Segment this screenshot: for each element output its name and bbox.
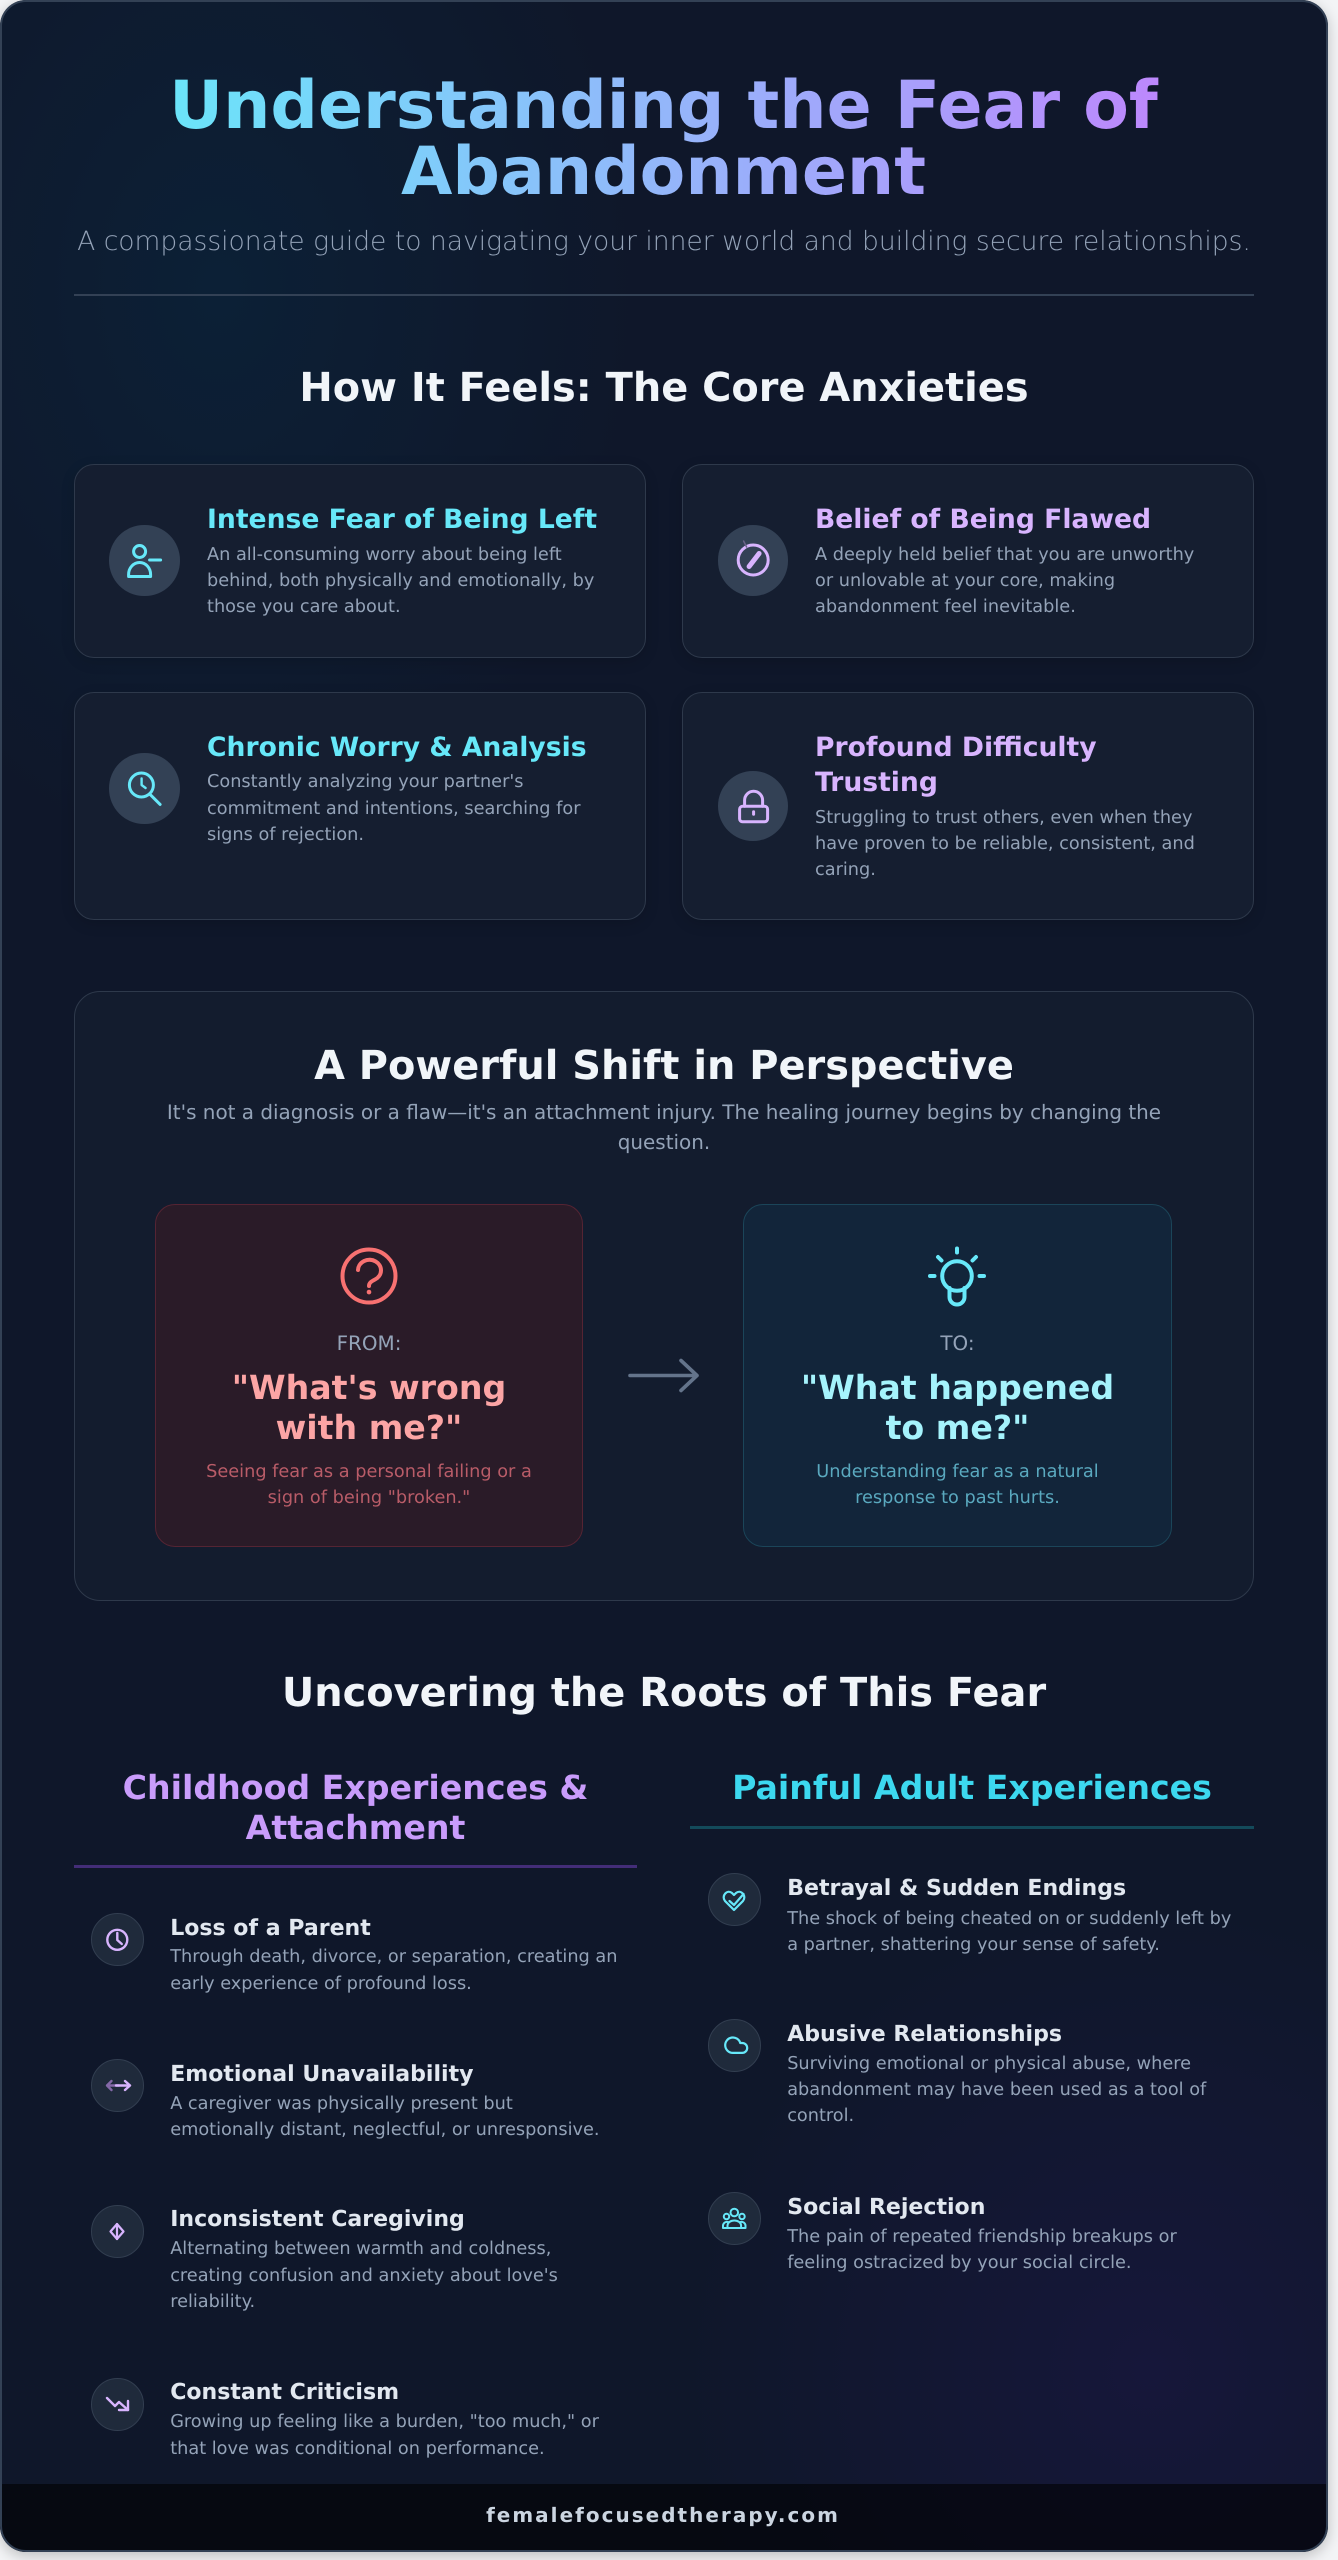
shift intro text: question. [618, 1130, 710, 1154]
shift intro text [167, 1100, 1161, 1154]
icon: trending down [91, 2378, 144, 2431]
card text: flawed [815, 504, 1194, 617]
card text: flawed: A deeply held belief that you are unworthy [815, 545, 1194, 565]
icon: user minus [109, 525, 180, 596]
to description: Understanding fear as a natural [816, 1462, 1099, 1482]
card text: flawed: or unlovable at your core, making [815, 571, 1115, 591]
heading: core anxieties: How It Feels: The Core Anxieties [299, 365, 1029, 411]
card text: intense fear: behind, both physically and emotionally, by [207, 571, 594, 591]
title [128, 72, 1198, 204]
from description: sign of being "broken." [268, 1488, 470, 1508]
item: emotional unavailability: emotionally distant, neglectful, or unresponsive. [170, 2120, 600, 2140]
card text: intense fear: Intense Fear of Being Left [207, 504, 597, 535]
from description [206, 1462, 532, 1508]
icon: flawed circle [718, 525, 788, 596]
icon: clock [91, 1913, 144, 1966]
footer link text: femalefocusedtherapy.com [486, 2503, 840, 2527]
item: inconsistent caregiving: creating confusion and anxiety about love's [170, 2266, 558, 2286]
item: constant criticism [170, 2380, 599, 2458]
item: inconsistent caregiving: Inconsistent Caregiving [170, 2207, 465, 2232]
column heading: childhood [123, 1768, 588, 1847]
panel: to [743, 1204, 1172, 1547]
icon: diamond [91, 2205, 144, 2258]
quote: what happened: "What happened [801, 1368, 1114, 1407]
panel: from [155, 1204, 583, 1547]
title: Abandonment [401, 132, 926, 210]
quote: what's wrong: with me?" [276, 1408, 462, 1447]
item: inconsistent caregiving: Alternating between warmth and coldness, [170, 2239, 551, 2259]
card text: trusting: Trusting [815, 767, 938, 798]
card text: chronic worry: Constantly analyzing your partner's [207, 772, 523, 792]
item: constant criticism: Growing up feeling like a burden, "too much," or [170, 2412, 599, 2432]
card text: chronic worry: Chronic Worry & Analysis [207, 732, 587, 763]
icon: arrows apart [91, 2059, 144, 2112]
label: from: FROM: [337, 1332, 401, 1355]
item: betrayal [787, 1876, 1231, 1955]
item: betrayal: Betrayal & Sudden Endings [787, 1876, 1126, 1901]
item: betrayal: a partner, shattering your sense of safety. [787, 1935, 1160, 1955]
column heading: childhood: Attachment [246, 1808, 465, 1847]
item: loss of a parent: Through death, divorce, or separation, creating an [170, 1947, 617, 1967]
item: betrayal: The shock of being cheated on or suddenly left by [787, 1909, 1231, 1929]
card text: trusting: caring. [815, 860, 876, 880]
item: emotional unavailability: A caregiver was physically present but [170, 2094, 513, 2114]
title: Understanding the Fear of [169, 66, 1158, 144]
item: social rejection: The pain of repeated friendship breakups or [787, 2227, 1177, 2247]
panel: intense fear of being left [74, 464, 646, 658]
arrow [628, 1358, 699, 1392]
item: social rejection [787, 2195, 1177, 2273]
card text: trusting: Struggling to trust others, even when they [815, 808, 1192, 828]
heading: roots: Uncovering the Roots of This Fear [282, 1670, 1046, 1716]
card text: intense fear: those you care about. [207, 597, 401, 617]
subtitle: A compassionate guide to navigating your inner world and building secure relationships. [77, 226, 1251, 257]
card text: flawed: abandonment feel inevitable. [815, 597, 1076, 617]
item: abusive relationships: abandonment may have been used as a tool of [787, 2080, 1206, 2100]
to description: response to past hurts. [855, 1488, 1060, 1508]
card text: flawed: Belief of Being Flawed [815, 504, 1151, 535]
item: emotional unavailability [170, 2062, 600, 2140]
item: inconsistent caregiving [170, 2207, 558, 2312]
item: constant criticism: Constant Criticism [170, 2380, 399, 2405]
icon: lightbulb [928, 1246, 986, 1306]
icon: question [340, 1248, 398, 1304]
quote: what's wrong: "What's wrong [232, 1368, 506, 1407]
item: social rejection: feeling ostracized by your social circle. [787, 2253, 1132, 2273]
panel: difficulty trusting [682, 692, 1254, 920]
to description [816, 1462, 1099, 1508]
icon: lock [718, 771, 788, 841]
shift intro text: It's not a diagnosis or a flaw—it's an attachment injury. The healing journey begins by changing the [167, 1100, 1161, 1124]
item: loss of a parent: early experience of profound loss. [170, 1974, 472, 1994]
card text: chronic worry: commitment and intentions, searching for [207, 799, 581, 819]
card text: trusting: have proven to be reliable, consistent, and [815, 834, 1195, 854]
panel: belief of being flawed [682, 464, 1254, 658]
quote: what happened: to me?" [886, 1408, 1029, 1447]
item: social rejection: Social Rejection [787, 2195, 985, 2220]
item: loss of a parent: Loss of a Parent [170, 1916, 371, 1941]
card text: chronic worry [207, 732, 587, 845]
card text: chronic worry: signs of rejection. [207, 825, 364, 845]
item: loss of a parent [170, 1916, 617, 1994]
item: abusive relationships [787, 2022, 1207, 2126]
card text: trusting: Profound Difficulty [815, 732, 1097, 763]
quote: what happened [801, 1368, 1114, 1447]
card text: intense fear [207, 504, 597, 617]
card text: intense fear: An all-consuming worry about being left [207, 545, 562, 565]
item: inconsistent caregiving: reliability. [170, 2292, 255, 2312]
item: abusive relationships: Abusive Relationships [787, 2022, 1062, 2047]
quote: what's wrong [232, 1368, 506, 1447]
item: abusive relationships: control. [787, 2106, 854, 2126]
label: to: TO: [940, 1332, 975, 1355]
from description: Seeing fear as a personal failing or a [206, 1462, 532, 1482]
panel: shift in perspective [74, 991, 1254, 1601]
icon: users [708, 2192, 761, 2245]
panel: chronic worry [74, 692, 646, 920]
heading: shift: A Powerful Shift in Perspective [314, 1043, 1014, 1089]
item: emotional unavailability: Emotional Unavailability [170, 2062, 474, 2087]
footer [0, 2484, 1328, 2552]
icon: heart check [708, 1873, 761, 1926]
column heading: childhood: Childhood Experiences & [123, 1768, 588, 1807]
item: abusive relationships: Surviving emotional or physical abuse, where [787, 2054, 1191, 2074]
card text: trusting [815, 732, 1195, 880]
column heading: adult: Painful Adult Experiences [732, 1768, 1212, 1807]
icon: cloud [708, 2019, 761, 2072]
icon: clock search [109, 753, 180, 824]
item: constant criticism: that love was conditional on performance. [170, 2438, 545, 2458]
